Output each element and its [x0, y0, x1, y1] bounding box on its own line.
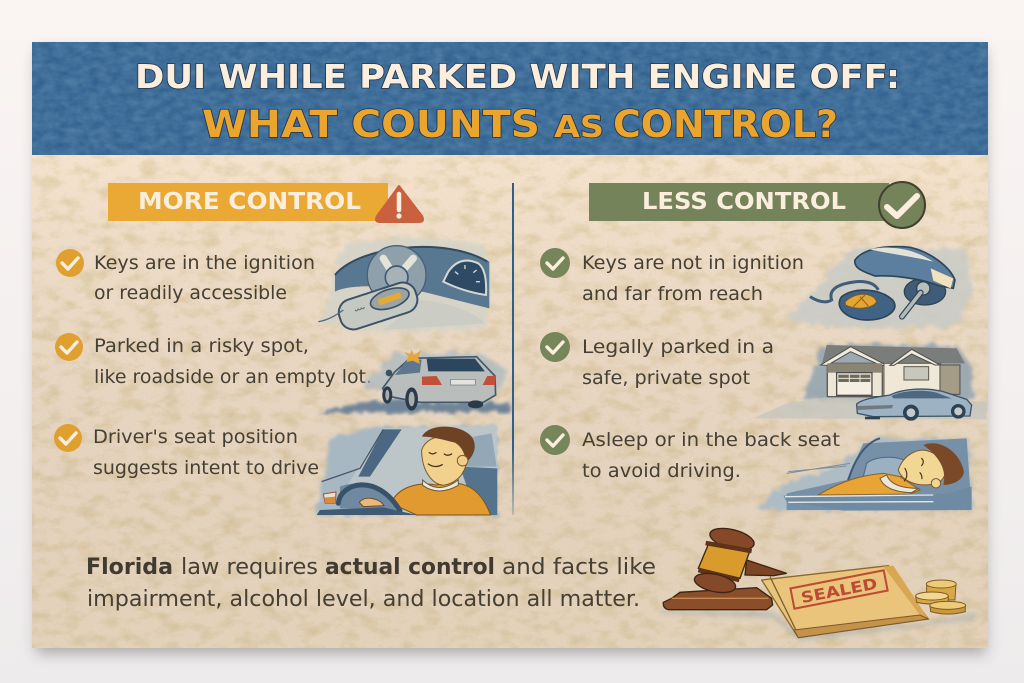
divider — [512, 183, 514, 515]
footer text: impairment, alcohol level, and location all matter. — [87, 587, 640, 612]
footer text: actual control — [325, 555, 495, 580]
footer text: and facts like — [502, 555, 656, 580]
footer text: Florida — [86, 555, 173, 580]
illustration: gavel, sealed envelope and coins — [660, 524, 980, 641]
illustration: keys and fob — [787, 247, 972, 328]
item: keys far away — [540, 247, 972, 328]
sealed envelope — [762, 566, 928, 638]
item: seat position — [54, 424, 497, 515]
illustration: house and car — [753, 345, 987, 421]
text — [94, 252, 315, 304]
text: to avoid driving. — [582, 460, 741, 482]
icon: check — [54, 424, 82, 452]
illustration: parked car — [317, 349, 510, 414]
text: and far from reach — [582, 283, 763, 305]
heading: less control: LESS CONTROL — [642, 189, 846, 215]
stamp: sealed: SEALED — [799, 575, 879, 607]
text — [582, 429, 840, 482]
icon: check — [540, 248, 570, 278]
panel: more control — [54, 183, 510, 515]
text: like roadside or an empty lot. — [94, 366, 372, 388]
illustration: dashboard and key fob — [318, 238, 492, 333]
text: suggests intent to drive — [93, 457, 319, 479]
title line 2 — [202, 103, 838, 146]
icon: warning triangle — [376, 186, 423, 222]
footer text: law requires — [181, 555, 318, 580]
text: Driver's seat position — [93, 426, 298, 448]
coins — [916, 580, 966, 614]
title line 1: DUI WHILE PARKED WITH ENGINE OFF: — [135, 57, 900, 96]
heading: more control — [108, 183, 423, 222]
item: asleep in back seat — [540, 425, 972, 511]
icon: check — [540, 425, 570, 455]
text — [582, 336, 774, 389]
item: risky spot — [55, 333, 510, 414]
text — [93, 426, 319, 479]
text: or readily accessible — [94, 282, 287, 304]
text: Asleep or in the back seat — [582, 429, 840, 451]
panel: less control — [540, 182, 987, 511]
text: safe, private spot — [582, 367, 750, 389]
icon: check — [540, 332, 570, 362]
icon: check badge — [879, 182, 925, 228]
icon: check — [56, 249, 84, 277]
gavel — [663, 524, 787, 610]
text: Parked in a risky spot, — [94, 335, 309, 357]
title line 2: AS — [554, 110, 604, 145]
text — [582, 252, 804, 305]
footer text — [86, 555, 656, 612]
title line 2: CONTROL? — [613, 103, 838, 146]
item: keys in ignition — [56, 238, 492, 333]
text: Keys are not in ignition — [582, 252, 804, 274]
heading: more control: MORE CONTROL — [138, 189, 361, 215]
heading: less control — [589, 182, 925, 228]
icon: check — [55, 333, 83, 361]
item: legally parked — [540, 332, 987, 421]
text: Keys are in the ignition — [94, 252, 315, 274]
illustration: person sleeping on back seat — [758, 438, 972, 511]
text — [94, 335, 372, 388]
title line 2: WHAT COUNTS — [202, 103, 540, 146]
illustration: driver at the wheel — [315, 426, 497, 515]
panel: parchment background — [32, 155, 988, 648]
panel: title banner — [32, 42, 988, 155]
text: Legally parked in a — [582, 336, 774, 358]
stamp: sealed — [790, 570, 888, 609]
